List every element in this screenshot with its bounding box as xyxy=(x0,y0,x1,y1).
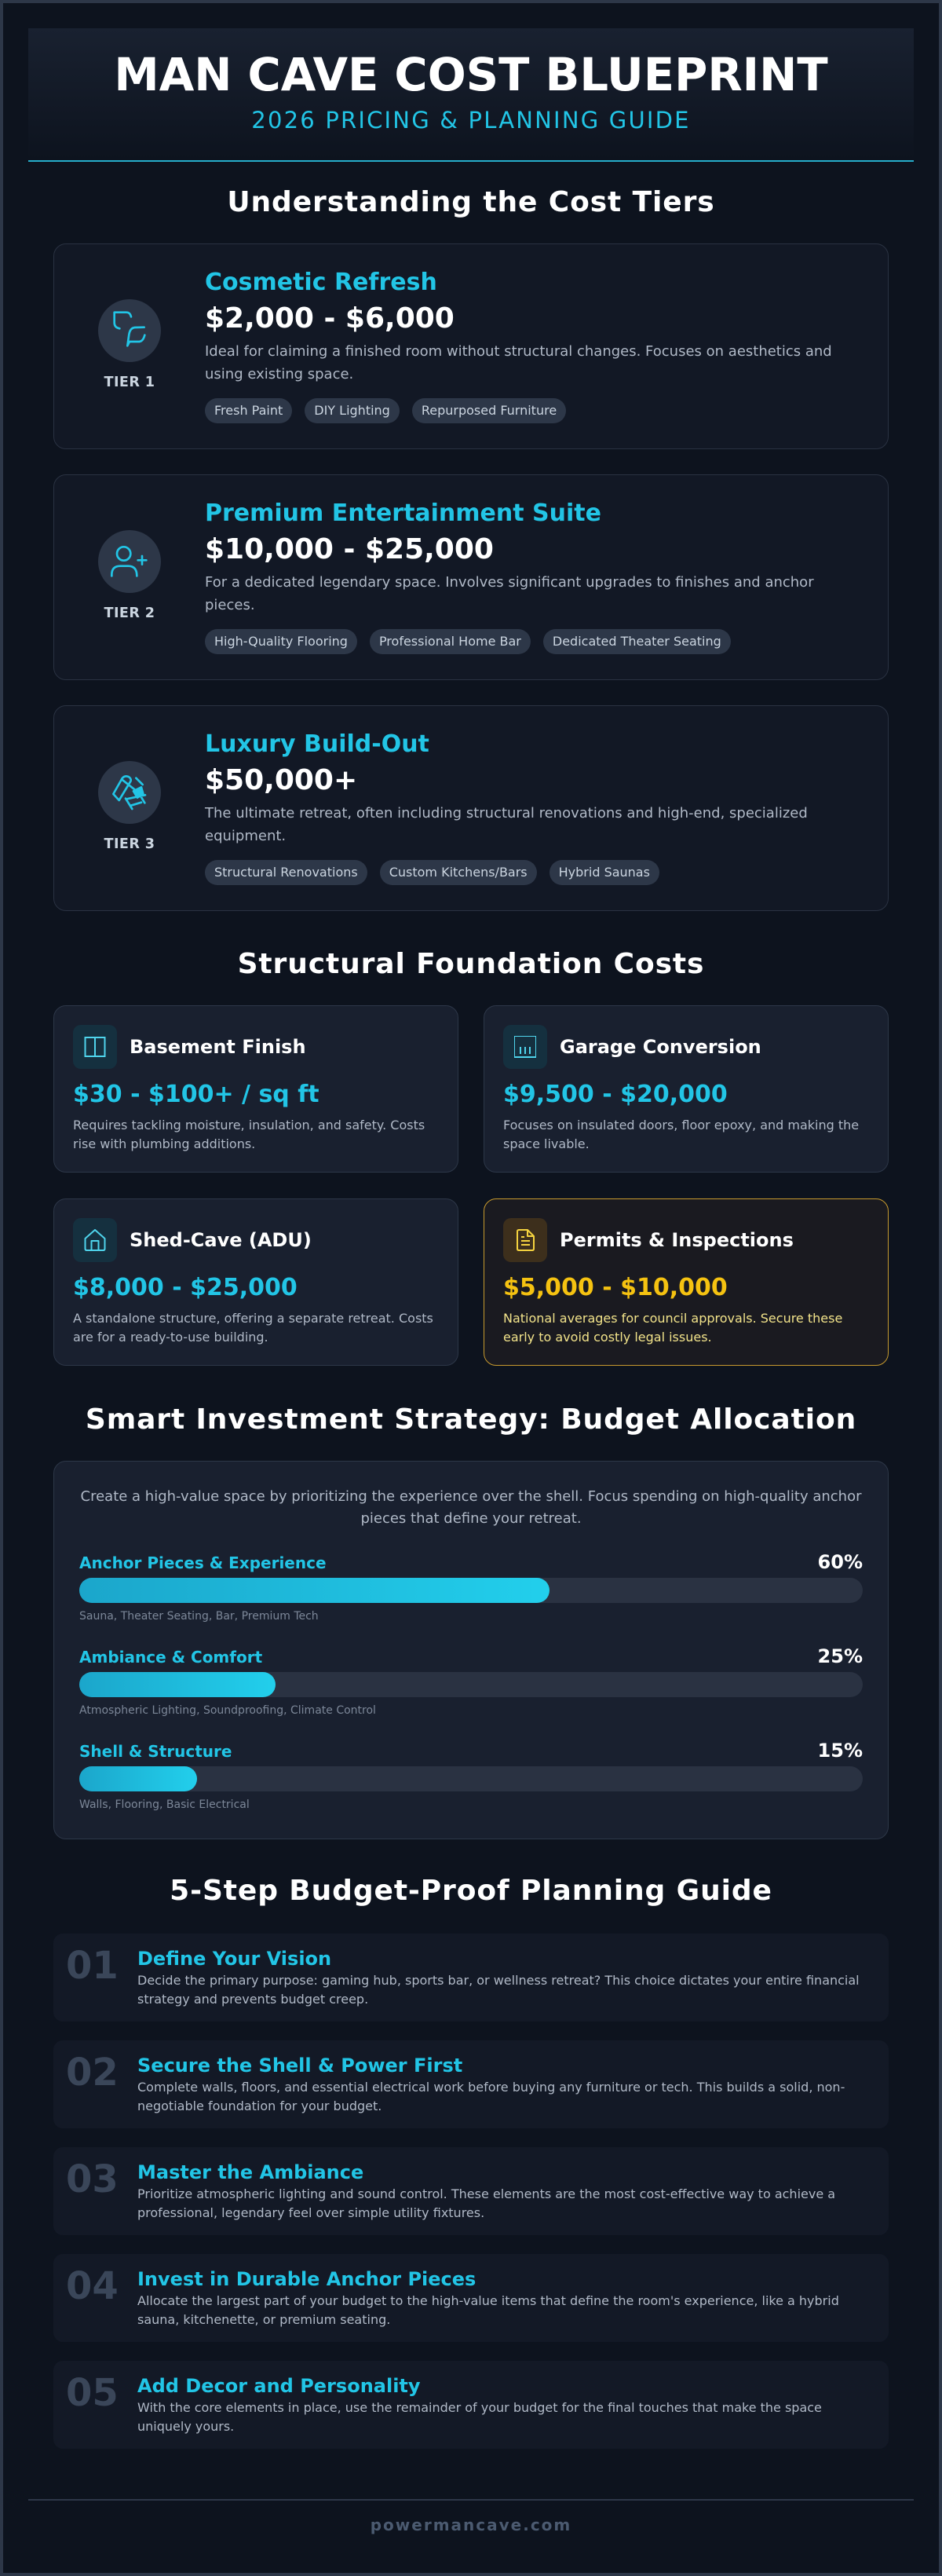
card description: National averages for council approvals. Secure these xyxy=(503,1311,842,1326)
step description xyxy=(137,2400,822,2434)
tier name: Premium Entertainment Suite xyxy=(205,499,601,527)
subtitle: 2026 PRICING & PLANNING GUIDE xyxy=(251,107,691,134)
panel: tier 3 xyxy=(53,705,889,911)
tier tags: Structural Renovations xyxy=(214,865,358,880)
step description: Decide the primary purpose: gaming hub, sports bar, or wellness retreat? This choice dictates your entire financial xyxy=(137,1973,860,1988)
tier description xyxy=(205,342,832,382)
step title: Define Your Vision xyxy=(137,1948,331,1970)
main title: MAN CAVE COST BLUEPRINT xyxy=(114,49,828,101)
card price: $8,000 - $25,000 xyxy=(73,1274,298,1301)
header banner xyxy=(28,28,914,162)
panel: tier 1 xyxy=(53,243,889,449)
tier label: TIER 3 xyxy=(104,836,155,851)
icon: house xyxy=(73,1218,117,1262)
card title: Shed-Cave (ADU) xyxy=(130,1228,312,1250)
card price: $30 - $100+ / sq ft xyxy=(73,1081,319,1108)
card description xyxy=(73,1118,425,1151)
card title: Garage Conversion xyxy=(560,1035,761,1057)
tier tags xyxy=(205,398,566,423)
step title: Master the Ambiance xyxy=(137,2161,363,2183)
step title: Secure the Shell & Power First xyxy=(137,2055,462,2077)
step description: sauna, kitchenette, or premium seating. xyxy=(137,2312,390,2327)
tier description: using existing space. xyxy=(205,366,353,382)
step description: Prioritize atmospheric lighting and sound control. These elements are the most cost-effective way to achieve a xyxy=(137,2186,835,2201)
step description: With the core elements in place, use the remainder of your budget for the final touches that make the space xyxy=(137,2400,822,2415)
step number: 01 xyxy=(66,1944,119,1988)
heading: planning guide: 5-Step Budget-Proof Planning Guide xyxy=(170,1874,772,1907)
tier tags: Repurposed Furniture xyxy=(422,403,557,418)
tier tags: Dedicated Theater Seating xyxy=(553,634,721,649)
tier name: Luxury Build-Out xyxy=(205,730,429,758)
panel: budget allocation chart xyxy=(53,1461,889,1839)
bar 3 xyxy=(79,1766,863,1791)
card price: $5,000 - $10,000 xyxy=(503,1274,728,1301)
step description xyxy=(137,1973,860,2007)
tier description xyxy=(205,573,814,613)
card description: Focuses on insulated doors, floor epoxy, and making the xyxy=(503,1118,859,1132)
intro text: Create a high-value space by prioritizing the experience over the shell. Focus spending on high-quality anchor xyxy=(81,1488,861,1505)
bar 2 xyxy=(79,1672,863,1697)
step number: 02 xyxy=(66,2051,119,2095)
step description: Allocate the largest part of your budget to the high-value items that define the room's experience, like a hybrid xyxy=(137,2293,839,2308)
step description: Complete walls, floors, and essential electrical work before buying any furniture or tech. This builds a solid, non- xyxy=(137,2080,845,2095)
panel: permits callout xyxy=(484,1198,889,1366)
card description: are for a ready-to-use building. xyxy=(73,1330,268,1345)
tier price: $50,000+ xyxy=(205,763,357,796)
step title: Invest in Durable Anchor Pieces xyxy=(137,2268,476,2290)
panel: garage conversion xyxy=(484,1005,889,1173)
heading: structural costs: Structural Foundation Costs xyxy=(238,947,704,980)
panel: step 1 xyxy=(53,1934,889,2022)
tier tags: Hybrid Saunas xyxy=(559,865,650,880)
icon: paint swatches xyxy=(98,299,161,362)
card description xyxy=(73,1311,433,1345)
tier label: TIER 1 xyxy=(104,374,155,390)
step number: 05 xyxy=(66,2371,119,2415)
panel: step 5 xyxy=(53,2361,889,2449)
icon: user plus xyxy=(98,530,161,593)
bar 2 label: Ambiance & Comfort xyxy=(79,1648,262,1667)
step title: Add Decor and Personality xyxy=(137,2375,421,2397)
card description: Requires tackling moisture, insulation, and safety. Costs xyxy=(73,1118,425,1132)
step description: professional, legendary feel over simple utility fixtures. xyxy=(137,2205,484,2220)
card description: rise with plumbing additions. xyxy=(73,1136,255,1151)
icon: garage xyxy=(503,1025,547,1069)
card description: space livable. xyxy=(503,1136,590,1151)
intro text xyxy=(81,1488,862,1527)
intro text: pieces that define your retreat. xyxy=(360,1510,582,1527)
footer xyxy=(28,2499,914,2546)
tier description: Ideal for claiming a finished room without structural changes. Focuses on aesthetics and xyxy=(205,342,832,360)
bar 1 value: 60% xyxy=(818,1551,863,1573)
tier name: Cosmetic Refresh xyxy=(205,269,437,296)
tier tags xyxy=(205,629,731,654)
tier description: The ultimate retreat, often including structural renovations and high-end, specialized xyxy=(205,804,808,821)
tier tags: Fresh Paint xyxy=(214,403,283,418)
bar 2 value: 25% xyxy=(818,1645,863,1667)
tier tags: DIY Lighting xyxy=(314,403,390,418)
card title: Basement Finish xyxy=(130,1035,306,1057)
tier description: equipment. xyxy=(205,828,286,843)
bar 1 xyxy=(79,1578,863,1603)
card description xyxy=(503,1311,842,1345)
card description xyxy=(503,1118,859,1151)
step number: 03 xyxy=(66,2157,119,2201)
step description: uniquely yours. xyxy=(137,2419,234,2434)
tier tags: High-Quality Flooring xyxy=(214,634,348,649)
panel: shed-cave xyxy=(53,1198,458,1366)
bar 1 note: Sauna, Theater Seating, Bar, Premium Tech xyxy=(79,1610,319,1623)
bar 1 label: Anchor Pieces & Experience xyxy=(79,1553,327,1572)
heading: cost tiers: Understanding the Cost Tiers xyxy=(227,185,715,218)
heading: budget allocation: Smart Investment Strategy: Budget Allocation xyxy=(86,1403,856,1436)
panel: step 4 xyxy=(53,2254,889,2342)
bar 3 note: Walls, Flooring, Basic Electrical xyxy=(79,1798,250,1811)
card price: $9,500 - $20,000 xyxy=(503,1081,728,1108)
bar 3 label: Shell & Structure xyxy=(79,1742,232,1761)
tier tags: Professional Home Bar xyxy=(379,634,521,649)
icon: document xyxy=(503,1218,547,1262)
bar 3 value: 15% xyxy=(818,1740,863,1762)
panel: basement finish xyxy=(53,1005,458,1173)
tier price: $10,000 - $25,000 xyxy=(205,532,494,565)
step description: negotiable foundation for your budget. xyxy=(137,2098,382,2113)
step description xyxy=(137,2080,845,2113)
step description: strategy and prevents budget creep. xyxy=(137,1992,368,2007)
panel: step 2 xyxy=(53,2040,889,2128)
step description xyxy=(137,2186,835,2220)
panel: tier 2 xyxy=(53,474,889,680)
card description: early to avoid costly legal issues. xyxy=(503,1330,712,1345)
card description: A standalone structure, offering a separate retreat. Costs xyxy=(73,1311,433,1326)
tier label: TIER 2 xyxy=(104,605,155,620)
tier tags xyxy=(205,860,659,885)
tier tags: Custom Kitchens/Bars xyxy=(389,865,528,880)
icon: basement xyxy=(73,1025,117,1069)
tier description: pieces. xyxy=(205,597,255,613)
tier description: For a dedicated legendary space. Involves significant upgrades to finishes and anchor xyxy=(205,573,814,591)
tier price: $2,000 - $6,000 xyxy=(205,302,455,335)
card title: Permits & Inspections xyxy=(560,1228,794,1250)
tier description xyxy=(204,804,808,843)
footer website: powermancave.com xyxy=(371,2516,571,2534)
bar 2 note: Atmospheric Lighting, Soundproofing, Climate Control xyxy=(79,1704,376,1717)
panel: step 3 xyxy=(53,2147,889,2235)
step number: 04 xyxy=(66,2264,119,2308)
step description xyxy=(137,2293,839,2327)
icon: tools xyxy=(98,761,161,824)
